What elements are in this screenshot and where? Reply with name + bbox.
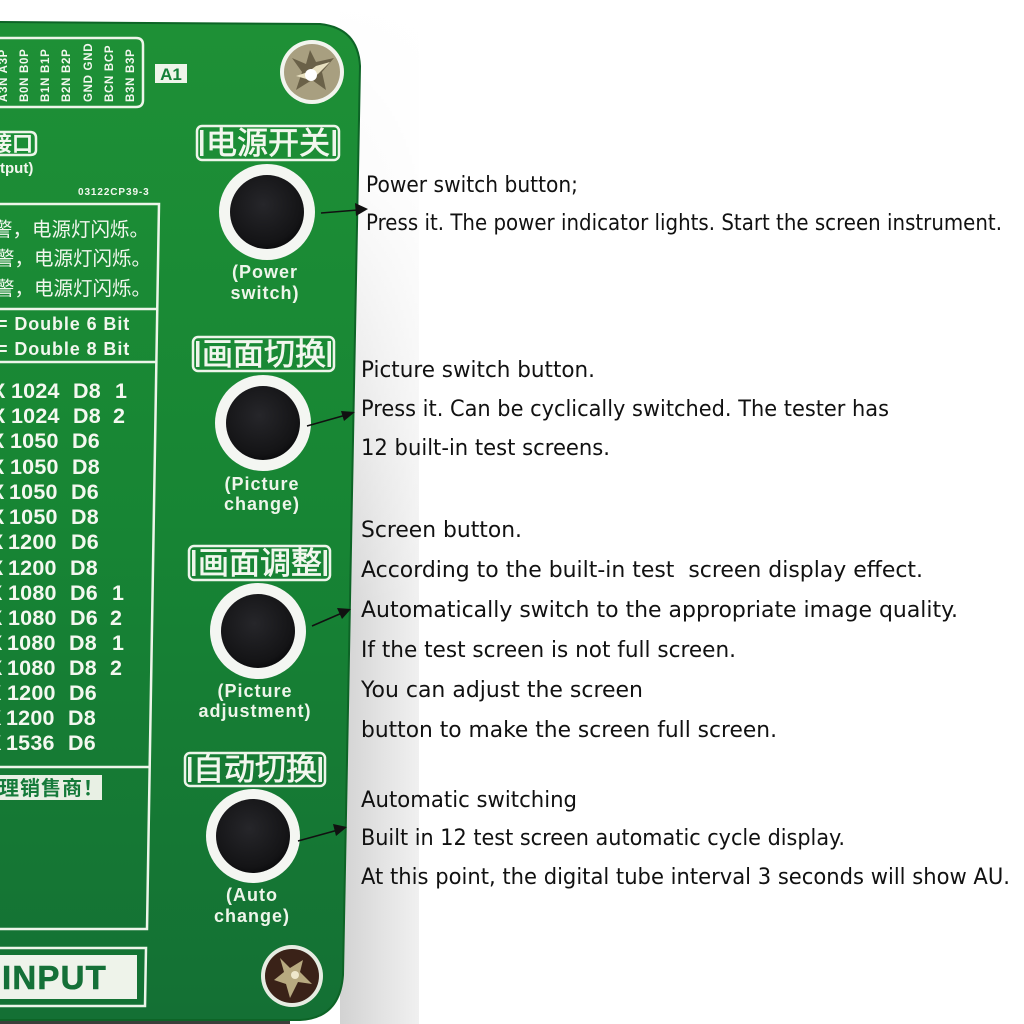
- pin label table: B1N B1P: [40, 49, 52, 102]
- resolution table: 1050: [10, 429, 59, 453]
- colour depth notes: = Double 8 Bit: [0, 339, 130, 359]
- INPUT label: INPUT: [2, 959, 107, 996]
- resolution table: 2: [113, 404, 125, 428]
- resolution table: 1024: [11, 404, 60, 428]
- A1 tag: A1: [160, 65, 182, 84]
- control: power switch: (Power: [232, 262, 298, 282]
- text: automatic switching description: At this point, the digital tube interval 3 seconds will show AU.: [361, 865, 1010, 890]
- text: automatic switching description: [361, 788, 1010, 890]
- resolution table: 1080: [7, 631, 56, 655]
- pin label table: [0, 38, 143, 107]
- text: power switch description: Power switch button;: [366, 173, 578, 198]
- text: picture switch description: Press it. Can be cyclically switched. The tester has: [361, 397, 889, 422]
- resolution table: D8: [70, 556, 98, 580]
- pin label table: B3N B3P: [125, 49, 137, 102]
- text: screen button description: Automatically switch to the appropriate image quality.: [361, 598, 958, 623]
- text: screen button description: [360, 518, 958, 743]
- control: auto change: [185, 752, 325, 926]
- control: picture change: (Picture: [224, 474, 300, 494]
- resolution table: 1200: [8, 530, 57, 554]
- resolution table: D6: [69, 681, 97, 705]
- resolution table: D8: [73, 379, 101, 403]
- resolution table: D6: [70, 581, 98, 605]
- colour depth notes: [0, 314, 130, 359]
- resolution table: 1080: [8, 606, 57, 630]
- dealer note: 理销售商！: [0, 777, 104, 800]
- resolution table: 1024: [11, 379, 60, 403]
- output connector heading: tput): [0, 160, 33, 177]
- resolution table: D8: [69, 656, 97, 680]
- control: auto change: (Auto: [226, 885, 278, 905]
- arrow: picture adjustment: [312, 608, 351, 626]
- text: screen button description: button to make the screen full screen.: [361, 718, 777, 743]
- text: automatic switching description: Automatic switching: [361, 788, 577, 813]
- resolution table: [0, 379, 127, 755]
- text: screen button description: According to the built-in test screen display effect.: [361, 558, 923, 583]
- text: automatic switching description: Built in 12 test screen automatic cycle display.: [361, 826, 845, 851]
- text: screen button description: You can adjust the screen: [360, 678, 643, 703]
- resolution table: 1200: [8, 556, 57, 580]
- text: power switch description: [366, 173, 1002, 236]
- resolution table: 1050: [9, 480, 58, 504]
- control: picture change: change): [224, 494, 300, 514]
- control: picture change: 画面切换: [202, 337, 326, 372]
- INPUT label: [0, 948, 146, 1006]
- resolution table: 1536: [6, 731, 55, 755]
- text: picture switch description: Picture switch button.: [361, 358, 595, 383]
- resolution table: 1: [112, 581, 124, 605]
- part number: 03122CP39-3: [78, 187, 150, 198]
- resolution table: D6: [71, 530, 99, 554]
- instruction table frame: [0, 204, 159, 929]
- A1 tag: [155, 64, 187, 84]
- resolution table: D8: [68, 706, 96, 730]
- screw: bottom: [261, 945, 323, 1007]
- resolution table: 1200: [6, 706, 55, 730]
- board shadow backdrop: [340, 0, 419, 1024]
- resolution table: 1080: [7, 656, 56, 680]
- panel: green circuit board: [0, 22, 360, 1024]
- resolution table: D6: [68, 731, 96, 755]
- pin label table: B0N B0P: [19, 49, 31, 102]
- control: power switch: switch): [230, 283, 300, 303]
- control: picture adjustment: 画面调整: [198, 546, 322, 581]
- resolution table: D6: [72, 429, 100, 453]
- colour depth notes: = Double 6 Bit: [0, 314, 130, 334]
- resolution table: 2: [110, 606, 122, 630]
- control: power switch: 电源开关: [206, 126, 330, 161]
- text: screen button description: Screen button.: [361, 518, 522, 543]
- pin label table: GND GND: [83, 43, 95, 102]
- resolution table: D8: [72, 455, 100, 479]
- resolution table: 1200: [7, 681, 56, 705]
- resolution table: 2: [110, 656, 122, 680]
- warning notes in Chinese: [0, 219, 151, 300]
- screw: top: [280, 40, 344, 104]
- control: picture change: [193, 337, 334, 514]
- pin label table: BCN BCP: [104, 45, 116, 102]
- resolution table: D8: [69, 631, 97, 655]
- resolution table: D6: [70, 606, 98, 630]
- arrow: auto change: [298, 824, 347, 841]
- resolution table: D8: [71, 505, 99, 529]
- text: picture switch description: 12 built-in test screens.: [361, 436, 610, 461]
- resolution table: D8: [73, 404, 101, 428]
- pin label table: B2N B2P: [61, 49, 73, 102]
- resolution table: 1080: [8, 581, 57, 605]
- arrow: power switch: [321, 203, 368, 216]
- text: picture switch description: [361, 358, 889, 461]
- control: auto change: change): [214, 906, 290, 926]
- control: picture adjustment: [189, 546, 330, 721]
- control: picture adjustment: (Picture: [217, 681, 293, 701]
- text: screen button description: If the test screen is not full screen.: [361, 638, 736, 663]
- control: picture adjustment: adjustment): [198, 701, 312, 721]
- resolution table: 1: [115, 379, 127, 403]
- arrow: picture change: [307, 411, 355, 426]
- control: power switch: [197, 126, 339, 303]
- resolution table: D6: [71, 480, 99, 504]
- resolution table: 1050: [10, 455, 59, 479]
- control: auto change: 自动切换: [193, 752, 317, 787]
- output connector heading: [0, 132, 36, 177]
- resolution table: 1050: [9, 505, 58, 529]
- resolution table: 1: [112, 631, 124, 655]
